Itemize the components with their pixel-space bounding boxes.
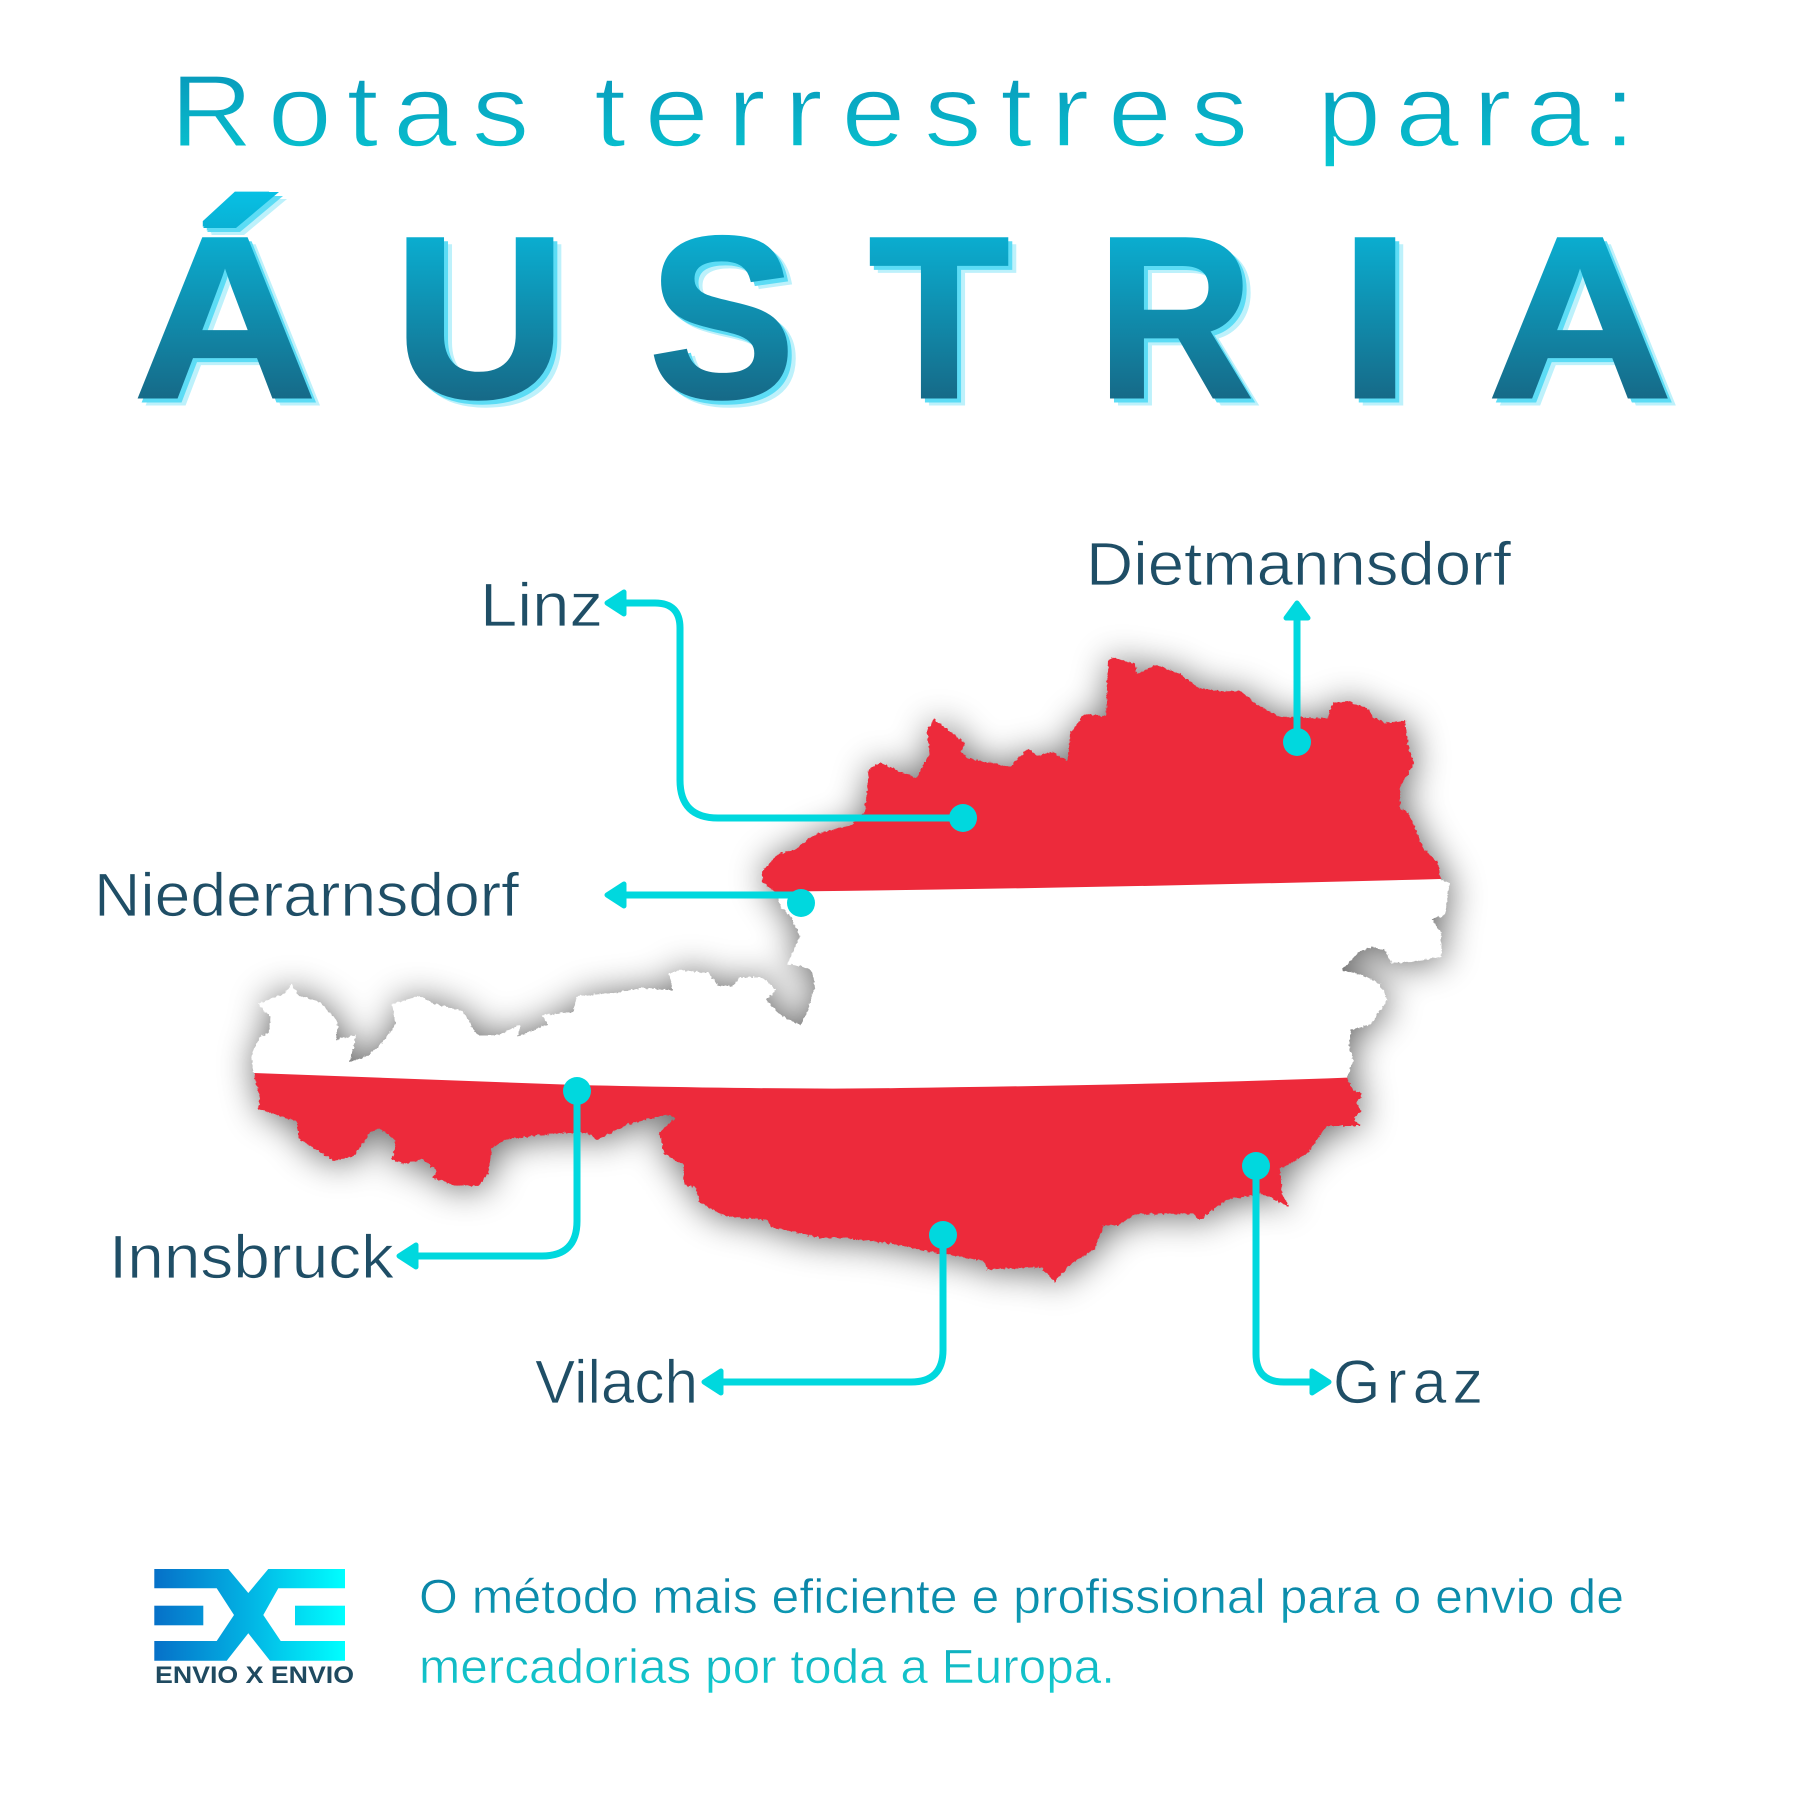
heading shadow, mid layer: A xyxy=(1492,194,1676,450)
heading shadow, mid layer: T xyxy=(873,193,1013,450)
heading shadow, mid layer: R xyxy=(1101,194,1257,450)
tagline text xyxy=(419,1571,1624,1694)
heading shadow, mid layer: S xyxy=(653,193,799,450)
callout: Linz xyxy=(480,571,977,832)
heading letters: A xyxy=(1488,190,1672,446)
title: Rotas terrestres para: para: xyxy=(1317,54,1636,168)
logo mark xyxy=(154,1569,345,1661)
heading shadow, light layer: I xyxy=(1347,196,1419,453)
heading letters: I xyxy=(1339,189,1411,446)
callout: Niederarnsdorf xyxy=(94,861,815,929)
map drop shadow xyxy=(253,660,1452,1284)
heading: ÁUSTRIA xyxy=(134,189,1680,453)
heading letters: T xyxy=(869,189,1009,446)
callout: Niederarnsdorf: Niederarnsdorf xyxy=(94,861,520,929)
callout: Innsbruck: Innsbruck xyxy=(109,1223,395,1291)
heading shadow, mid layer: U xyxy=(398,193,570,450)
callout: Graz: Graz xyxy=(1333,1348,1483,1416)
heading shadow, light layer: T xyxy=(877,196,1017,453)
heading shadow, mid layer: I xyxy=(1343,193,1415,450)
title: Rotas terrestres para xyxy=(170,54,1636,168)
callout: Dietmannsdorf: Dietmannsdorf xyxy=(1086,530,1512,598)
heading shadow, light layer: U xyxy=(402,196,574,453)
tagline text: mercadorias por toda a Europa. xyxy=(419,1641,1115,1694)
title: Rotas terrestres para: Rotas xyxy=(170,54,529,168)
callout: Graz xyxy=(1242,1152,1483,1416)
heading letters xyxy=(134,189,1672,446)
callout: Vilach xyxy=(535,1221,957,1416)
heading shadow, light layer: Á xyxy=(142,197,324,453)
map of Austria with flag xyxy=(229,639,1474,1302)
callout: Dietmannsdorf xyxy=(1086,530,1512,756)
heading shadow, light layer: R xyxy=(1105,197,1261,453)
callout: Linz: Linz xyxy=(480,571,603,639)
title: Rotas terrestres para: terrestres xyxy=(594,54,1248,168)
logo wordmark: ENVIO X ENVIO xyxy=(155,1662,354,1689)
heading letters: U xyxy=(394,189,566,446)
heading shadow, light layer: S xyxy=(657,196,803,453)
infographic canvas xyxy=(100,76,1676,1693)
flag-coloured silhouette xyxy=(251,657,1450,1282)
heading shadow, light layer: A xyxy=(1496,197,1680,453)
heading letters: R xyxy=(1097,190,1253,446)
tagline text: O método mais eficiente e profissional para o envio de xyxy=(419,1571,1624,1624)
heading letters: S xyxy=(649,189,795,446)
logo: Envio X Envio xyxy=(154,1569,354,1689)
heading shadow, light layer xyxy=(142,196,1680,453)
heading letters: Á xyxy=(134,190,316,446)
callout: Vilach: Vilach xyxy=(535,1348,698,1416)
heading shadow, mid layer xyxy=(138,193,1676,450)
callout: Innsbruck xyxy=(109,1077,591,1291)
heading shadow, mid layer: Á xyxy=(138,194,320,450)
